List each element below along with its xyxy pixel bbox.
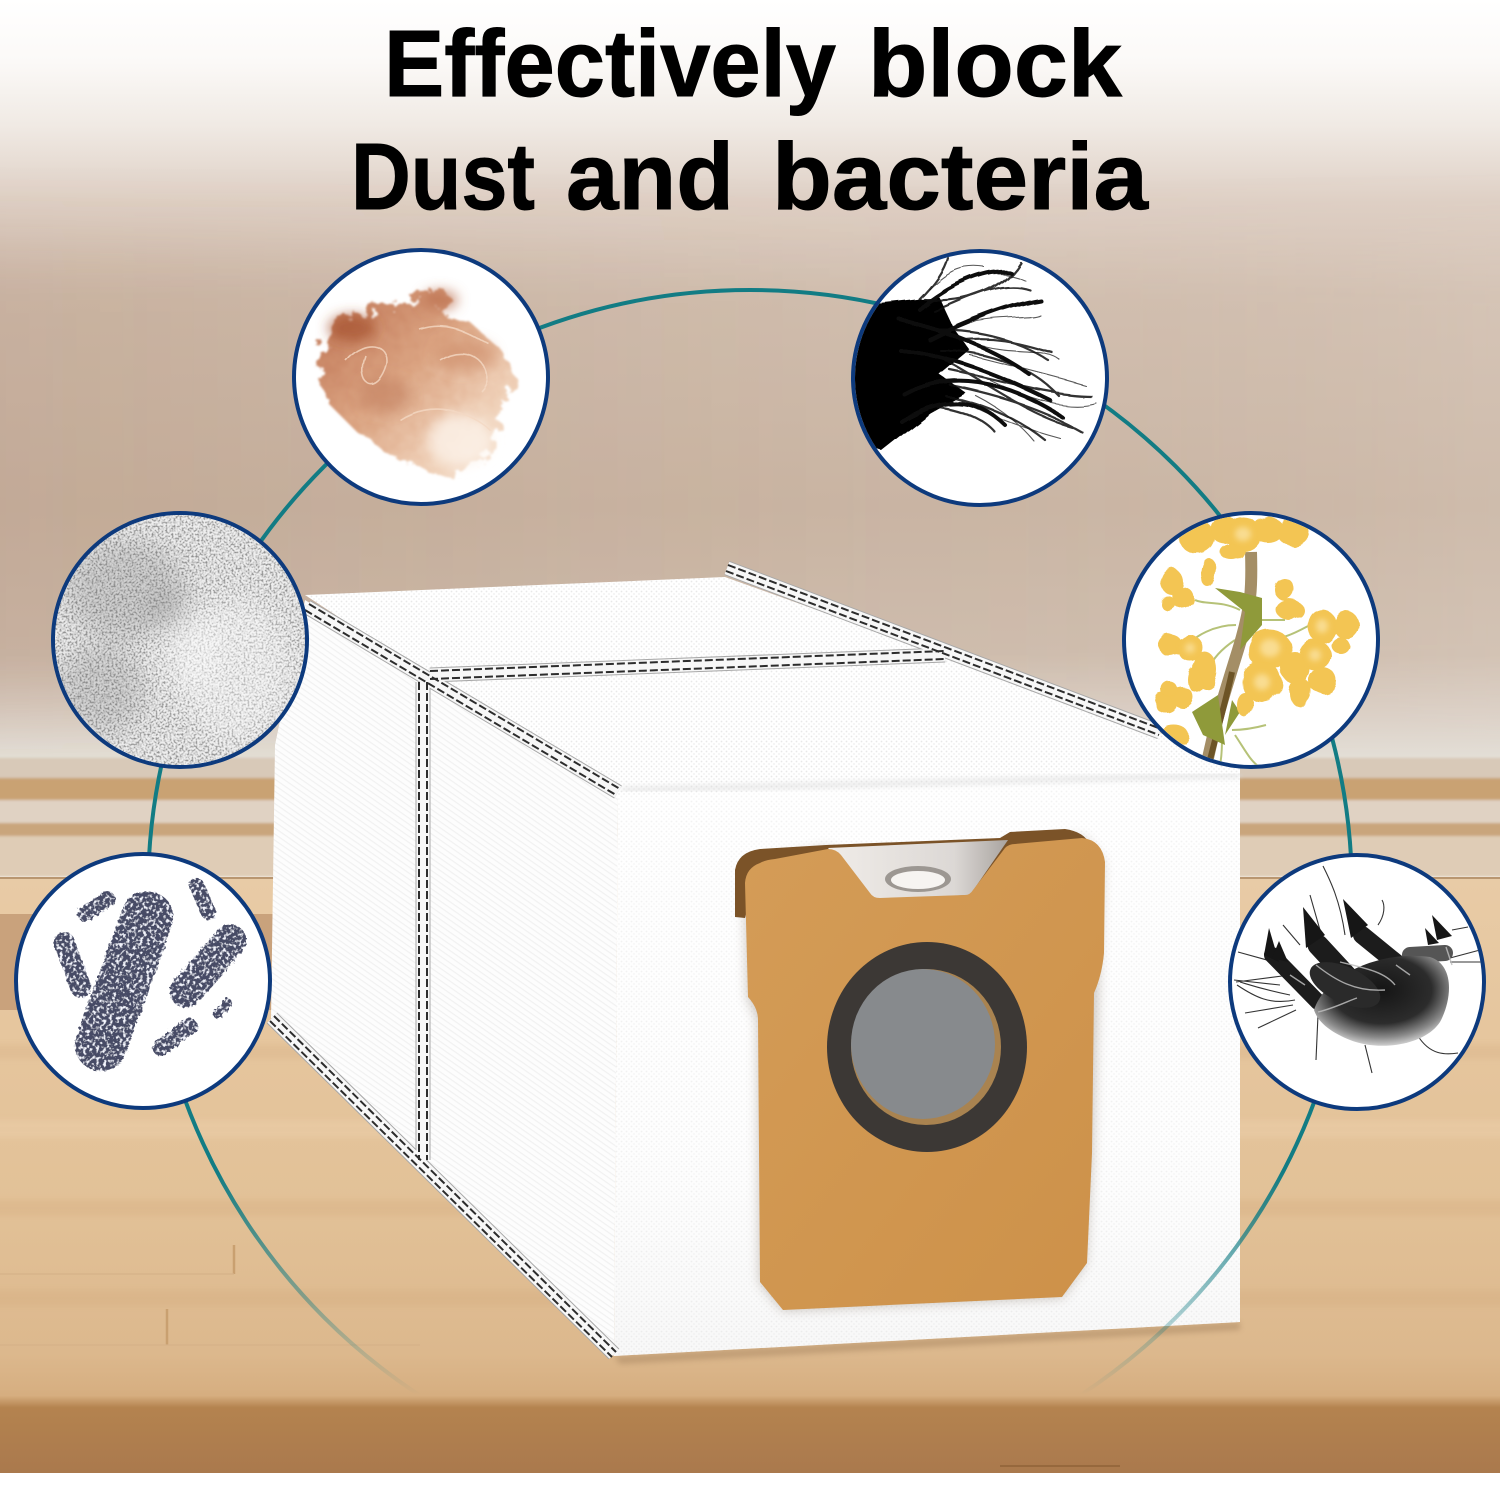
rear cardboard layers xyxy=(735,829,1090,918)
stem leaves xyxy=(1192,588,1262,745)
hanger hole xyxy=(885,866,951,892)
product: filter bag xyxy=(270,565,1240,1364)
title: and xyxy=(566,124,734,230)
filter opening xyxy=(851,969,995,1119)
panel shadow xyxy=(745,838,1102,1310)
title: bacteria xyxy=(772,124,1149,230)
cardboard plate xyxy=(745,838,1105,1310)
mite claws xyxy=(1264,899,1452,962)
title: block xyxy=(868,11,1122,117)
mite body xyxy=(1314,956,1449,1046)
title xyxy=(351,11,1149,230)
bag top face xyxy=(305,577,1240,800)
gasket ring xyxy=(827,942,1027,1152)
hair mass xyxy=(850,298,970,450)
hair strands xyxy=(900,258,1095,442)
bag seams xyxy=(270,565,1161,1357)
wool body xyxy=(318,287,518,478)
white hanger tab xyxy=(828,840,1008,899)
mite hairs xyxy=(1234,866,1481,1073)
teal connecting arc xyxy=(148,290,1352,1494)
mite legs xyxy=(1272,935,1445,1002)
bag front face xyxy=(614,780,1240,1356)
bag shadow on floor xyxy=(614,1322,1240,1364)
flower stem xyxy=(1208,552,1251,758)
icon: pollen flowers xyxy=(1124,513,1378,767)
icon: bacteria xyxy=(16,854,270,1108)
bag left face xyxy=(271,600,618,1356)
flower clusters xyxy=(1154,516,1359,744)
icon: black hair xyxy=(850,251,1107,505)
top cardboard panel xyxy=(735,829,1105,1310)
title: Effectively xyxy=(384,11,836,117)
flower pedicels xyxy=(1194,599,1308,765)
icon: dust xyxy=(53,513,307,767)
icon: hair wool clump xyxy=(294,250,548,504)
title: Dust xyxy=(351,124,535,230)
fold shading xyxy=(622,775,1240,790)
icon: dust mite xyxy=(1230,855,1484,1109)
mite highlights xyxy=(1290,947,1452,1012)
